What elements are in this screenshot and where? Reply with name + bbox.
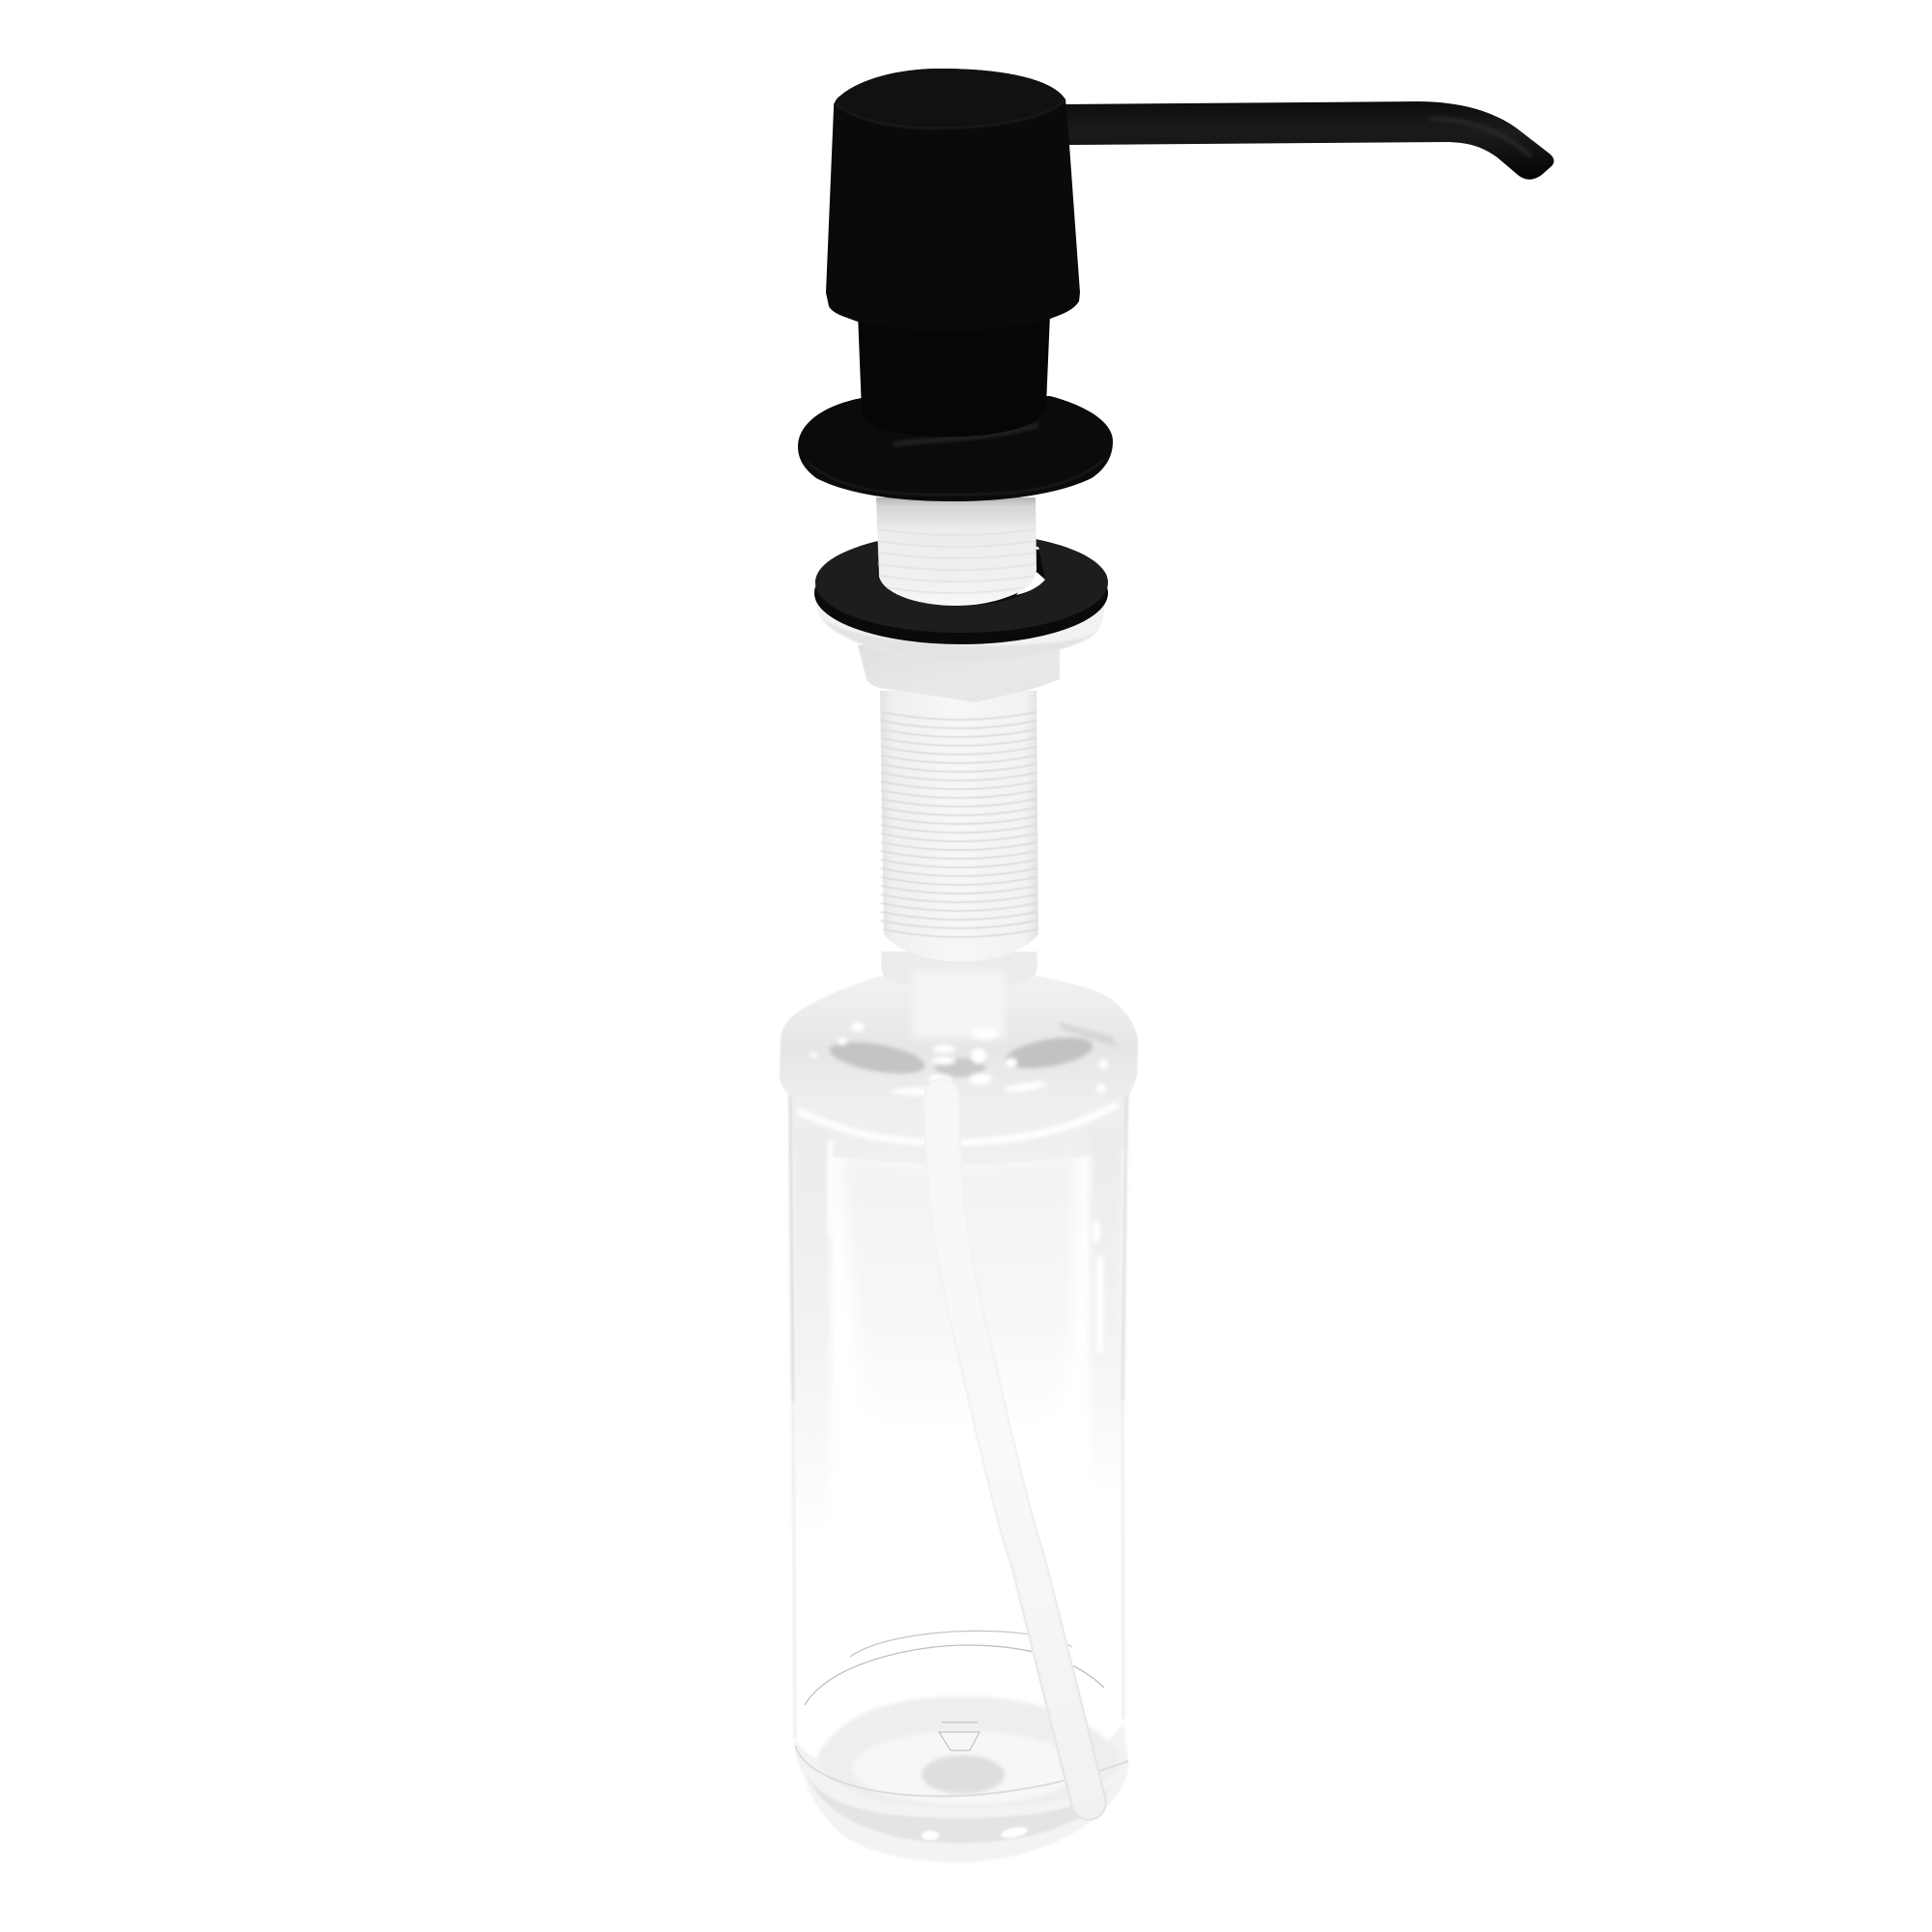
bottle shoulder [780,976,1138,1108]
bottle neck [881,952,1037,1038]
left edge strip [792,1130,831,1536]
base recess [816,1696,1121,1808]
vertical highlights [828,1140,1103,1352]
white washer [814,580,1105,662]
spout bend highlight [1430,119,1531,156]
head [826,69,1080,330]
shoulder rim band [787,1087,1130,1164]
inner body panel [840,1151,1077,1430]
body outer edges [790,1096,1126,1739]
ring top face [815,532,1108,633]
spout [1063,101,1554,180]
upper thread body [876,497,1037,606]
base rings [795,1631,1128,1796]
base foot bulge [795,1722,1128,1862]
washer lower shade [821,618,1096,662]
upper thread lines [878,529,1036,593]
hex nut [858,645,1060,702]
head top edge highlight [836,100,1065,128]
shoulder shadows and highlights [810,1022,1119,1095]
base inner disc [852,1731,1080,1804]
white rim arc [799,1104,1118,1143]
flange [798,396,1113,501]
base lower band [807,1776,1111,1843]
flange bevel highlight [807,460,1104,495]
base centre dimple [922,1755,1005,1794]
dip tube edge [942,1096,1089,1803]
neck vertical streak [913,971,1005,1038]
ring edge [814,542,1108,644]
threaded shank [880,691,1038,962]
dip tube core [942,1096,1089,1803]
upper thread through ring [876,497,1037,606]
washer body [814,580,1105,662]
recycling mark [939,1722,980,1750]
flange flare highlight [894,425,1038,444]
right edge strip [1090,1130,1123,1497]
hole gap [1016,572,1045,595]
head top face [834,69,1065,128]
black pump [798,69,1554,501]
bottle [780,952,1138,1862]
shank threads [881,712,1037,937]
shank body [880,691,1038,962]
black mounting ring [814,532,1108,644]
neck [858,314,1050,437]
base highlights [922,1825,1029,1840]
